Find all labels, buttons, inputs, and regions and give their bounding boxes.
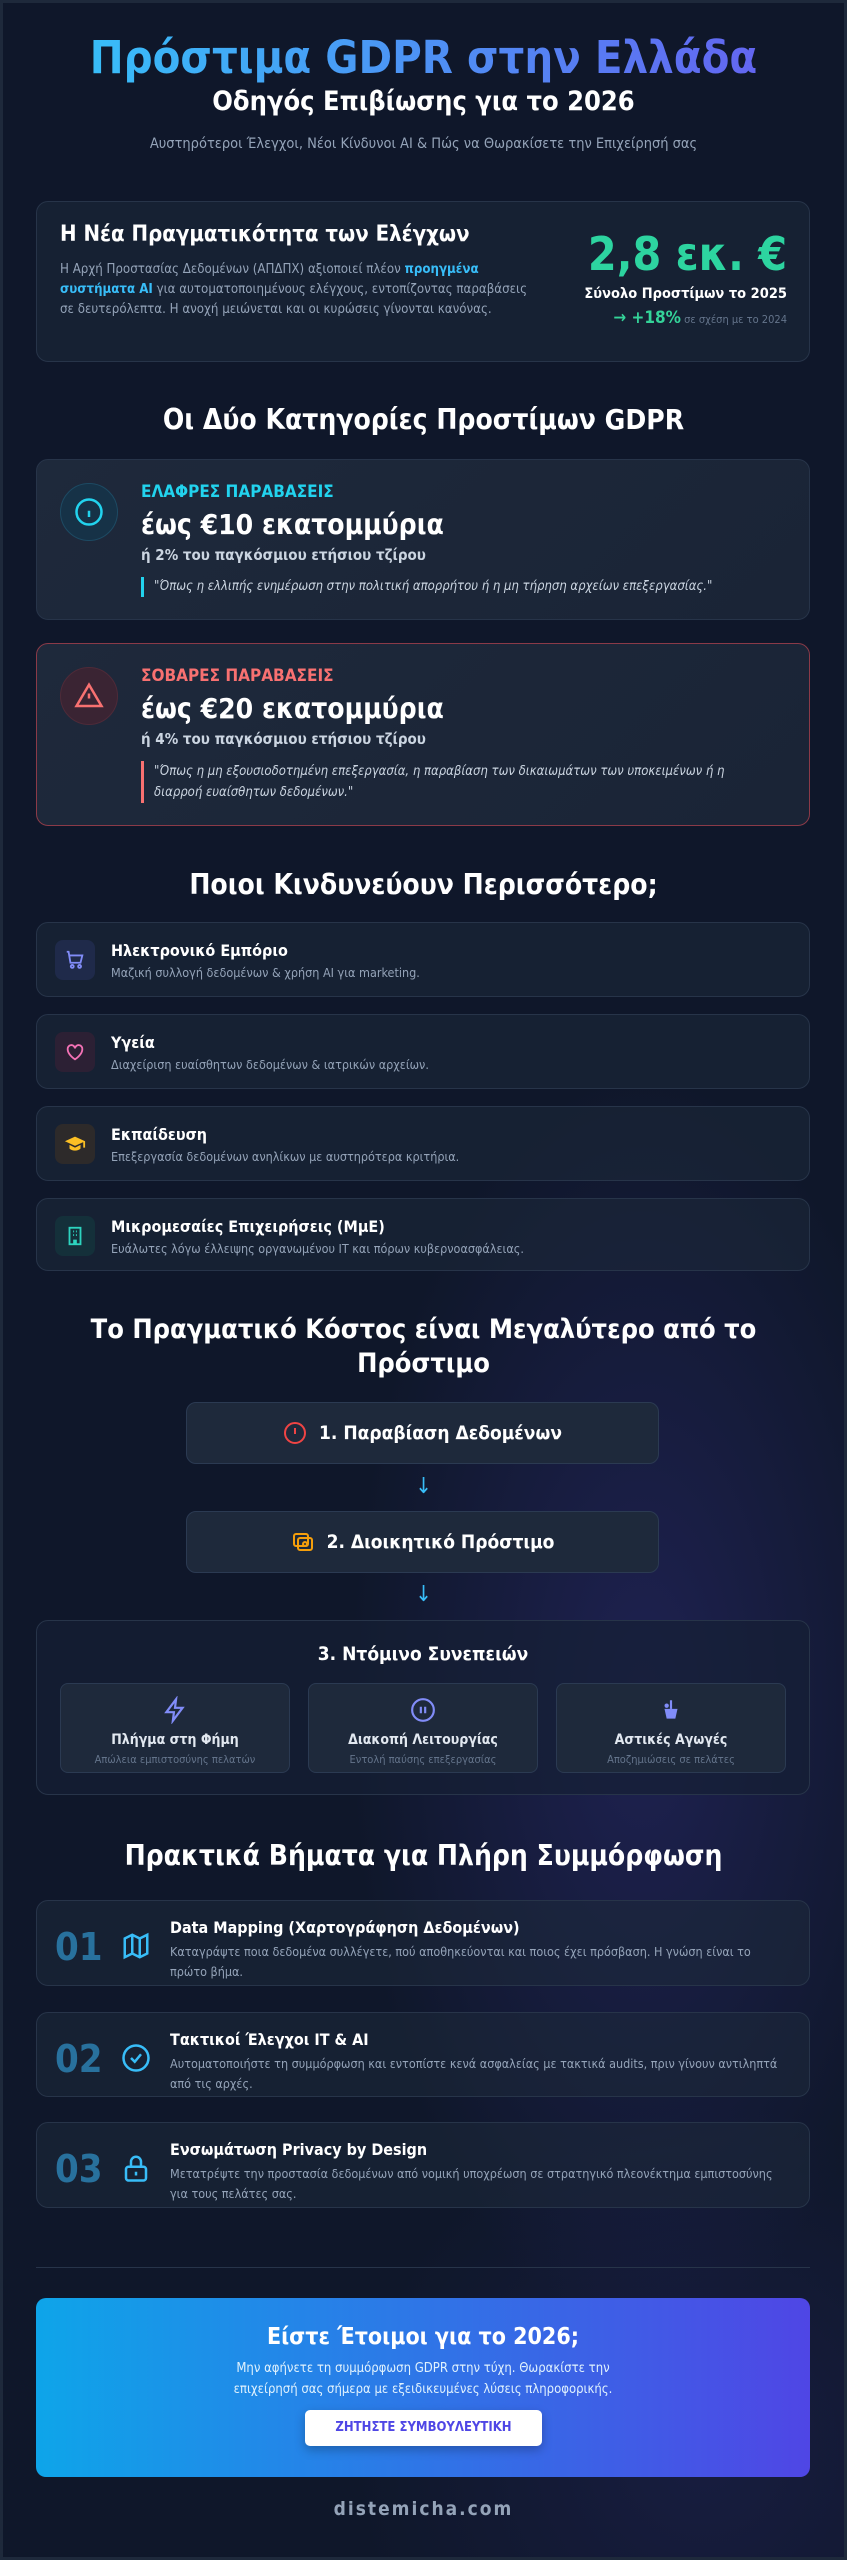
CTA panel — [36, 2298, 810, 2477]
panel: education — [36, 1106, 810, 1181]
heading: practical steps: Πρακτικά Βήματα για Πλήρη Συμμόρφωση — [125, 1839, 722, 1872]
stat: 2.8 million: 2,8 εκ. € — [588, 227, 787, 281]
quote: "Όπως η ελλιπής ενημέρωση στην πολιτική απορρήτου ή η μη τήρηση αρχείων επεξεργασίας." — [154, 579, 712, 594]
title: Πρόστιμα GDPR στην Ελλάδα — [90, 31, 757, 84]
flow step 2 — [186, 1511, 659, 1573]
step 01 — [36, 1900, 810, 1986]
percentage: ή 2% του παγκόσμιου ετήσιου τζίρου — [141, 546, 426, 564]
subtitle: Οδηγός Επιβίωσης για το 2026 — [212, 86, 635, 117]
icon: heart — [55, 1032, 95, 1072]
panel: e-commerce: Μαζική συλλογή δεδομένων & χρήση AI για marketing. — [111, 965, 420, 980]
arrow: ↓ — [415, 1474, 432, 1499]
sub: lawsuits: Αποζημιώσεις σε πελάτες — [607, 1753, 735, 1766]
amount: έως €10 εκατομμύρια — [141, 508, 444, 541]
heading: two categories: Οι Δύο Κατηγορίες Προστίμων GDPR — [163, 403, 684, 436]
icon: lock — [124, 2156, 148, 2182]
panel: education: Εκπαίδευση — [111, 1125, 207, 1144]
CTA button: ΖΗΤΗΣΤΕ ΣΥΜΒΟΥΛΕΥΤΙΚΗ — [335, 2420, 512, 2435]
heading: real cost — [90, 1314, 756, 1379]
panel: e-commerce — [36, 922, 810, 997]
panel: serious violations — [36, 643, 810, 826]
panel: SMEs: Ευάλωτες λόγω έλλειψης οργανωμένου IT και πόρων κυβερνοασφάλειας. — [111, 1241, 524, 1256]
panel: health — [36, 1014, 810, 1089]
step 02: Αυτοματοποιήστε τη συμμόρφωση και εντοπίστε κενά ασφαλείας με τακτικά audits, πριν γίνουν αντιληπτά από τις αρχές. — [170, 2056, 777, 2091]
sub: reputation: Πλήγμα στη Φήμη — [111, 1732, 239, 1748]
panel: e-commerce: Ηλεκτρονικό Εμπόριο — [111, 941, 288, 960]
step 02: Τακτικοί Έλεγχοι IT & AI — [170, 2030, 369, 2049]
sub: reputation: Απώλεια εμπιστοσύνης πελατών — [95, 1753, 255, 1766]
footer: distemicha.com — [334, 2498, 513, 2520]
stat: 2.8 million — [584, 227, 787, 328]
heading: real cost: Το Πραγματικό Κόστος είναι Μεγαλύτερο από το — [91, 1314, 756, 1345]
tagline: Αυστηρότεροι Έλεγχοι, Νέοι Κίνδυνοι AI & Πώς να Θωρακίσετε την Επιχείρησή σας — [150, 136, 697, 152]
heading: Η Νέα Πραγματικότητα των Ελέγχων — [60, 222, 470, 247]
sub: lawsuits — [556, 1683, 786, 1773]
sub: operations — [308, 1683, 538, 1773]
panel: SMEs — [36, 1198, 810, 1271]
sub: lawsuits: Αστικές Αγωγές — [615, 1732, 727, 1748]
CTA text — [234, 2361, 612, 2397]
icon: graduation — [55, 1124, 95, 1164]
CTA text: Μην αφήνετε τη συμμόρφωση GDPR στην τύχη. Θωρακίστε την — [236, 2361, 610, 2376]
arrow: ↓ — [415, 1582, 432, 1607]
panel: health: Υγεία — [111, 1033, 155, 1052]
label: ΕΛΑΦΡΕΣ ΠΑΡΑΒΑΣΕΙΣ — [141, 482, 334, 502]
stat: 2.8 million: → +18% σε σχέση με το 2024 — [613, 308, 787, 328]
percentage: ή 4% του παγκόσμιου ετήσιου τζίρου — [141, 730, 426, 748]
step 03 — [36, 2122, 810, 2208]
step 01: Data Mapping (Χαρτογράφηση Δεδομένων) — [170, 1918, 520, 1937]
amount: έως €20 εκατομμύρια — [141, 692, 444, 725]
step 02: 02 — [55, 2037, 103, 2081]
CTA heading: Είστε Έτοιμοι για το 2026; — [267, 2324, 579, 2350]
sub: operations: Εντολή παύσης επεξεργασίας — [350, 1753, 496, 1766]
heading: who is at risk: Ποιοι Κινδυνεύουν Περισσότερο; — [189, 868, 658, 901]
sub: reputation — [60, 1683, 290, 1773]
icon: info — [60, 483, 118, 541]
icon: money — [293, 1533, 313, 1551]
panel: education: Επεξεργασία δεδομένων ανηλίκων με αυστηρότερα κριτήρια. — [111, 1149, 459, 1164]
step 03: Μετατρέψτε την προστασία δεδομένων από νομική υποχρέωση σε στρατηγικό πλεονέκτημα εμπιστοσύνης για τους πελάτες σας. — [170, 2166, 773, 2201]
icon: cart — [55, 940, 95, 980]
heading: 3. Ντόμινο Συνεπειών — [318, 1643, 528, 1665]
icon: building — [55, 1216, 95, 1256]
heading: real cost: Πρόστιμο — [357, 1348, 490, 1379]
step 03: Ενσωμάτωση Privacy by Design — [170, 2140, 427, 2159]
CTA button — [305, 2410, 542, 2446]
text block: Η Αρχή Προστασίας Δεδομένων (ΑΠΔΠΧ) αξιοποιεί πλέον προηγμένα συστήματα AI για αυτοματοποιημένους ελέγχους, εντοπίζοντας παραβάσεις σε δευτερόλεπτα. Η ανοχή μειώνεται και οι κυρώσεις γίνονται κανόνας. — [60, 262, 527, 317]
quote: "Όπως η μη εξουσιοδοτημένη επεξεργασία, η παραβίαση των δικαιωμάτων των υποκειμένων ή η διαρροή ευαίσθητων δεδομένων." — [154, 764, 724, 800]
sub: operations: Διακοπή Λειτουργίας — [348, 1732, 498, 1748]
step 01: Καταγράψτε ποια δεδομένα συλλέγετε, πού αποθηκεύονται και ποιος έχει πρόσβαση. Η γνώση είναι το πρώτο βήμα. — [170, 1944, 751, 1979]
flow step 1: 1. Παραβίαση Δεδομένων — [319, 1422, 562, 1444]
step 01: 01 — [55, 1925, 103, 1969]
flow step 1 — [186, 1402, 659, 1464]
icon: check — [122, 2044, 150, 2072]
icon: map — [124, 1932, 148, 1960]
panel: new reality — [36, 201, 810, 362]
icon: alert — [284, 1422, 306, 1444]
panel: SMEs: Μικρομεσαίες Επιχειρήσεις (ΜμΕ) — [111, 1217, 385, 1236]
CTA text: επιχείρησή σας σήμερα με εξειδικευμένες λύσεις πληροφορικής. — [234, 2382, 612, 2397]
icon: warning — [60, 667, 118, 725]
label: ΣΟΒΑΡΕΣ ΠΑΡΑΒΑΣΕΙΣ — [141, 666, 334, 686]
step 02 — [36, 2012, 810, 2097]
flow step 2: 2. Διοικητικό Πρόστιμο — [327, 1531, 554, 1553]
panel: domino — [36, 1620, 810, 1795]
stat: 2.8 million: Σύνολο Προστίμων το 2025 — [584, 286, 787, 302]
panel: light violations — [36, 459, 810, 620]
panel: health: Διαχείριση ευαίσθητων δεδομένων & ιατρικών αρχείων. — [111, 1057, 429, 1072]
step 03: 03 — [55, 2147, 103, 2191]
